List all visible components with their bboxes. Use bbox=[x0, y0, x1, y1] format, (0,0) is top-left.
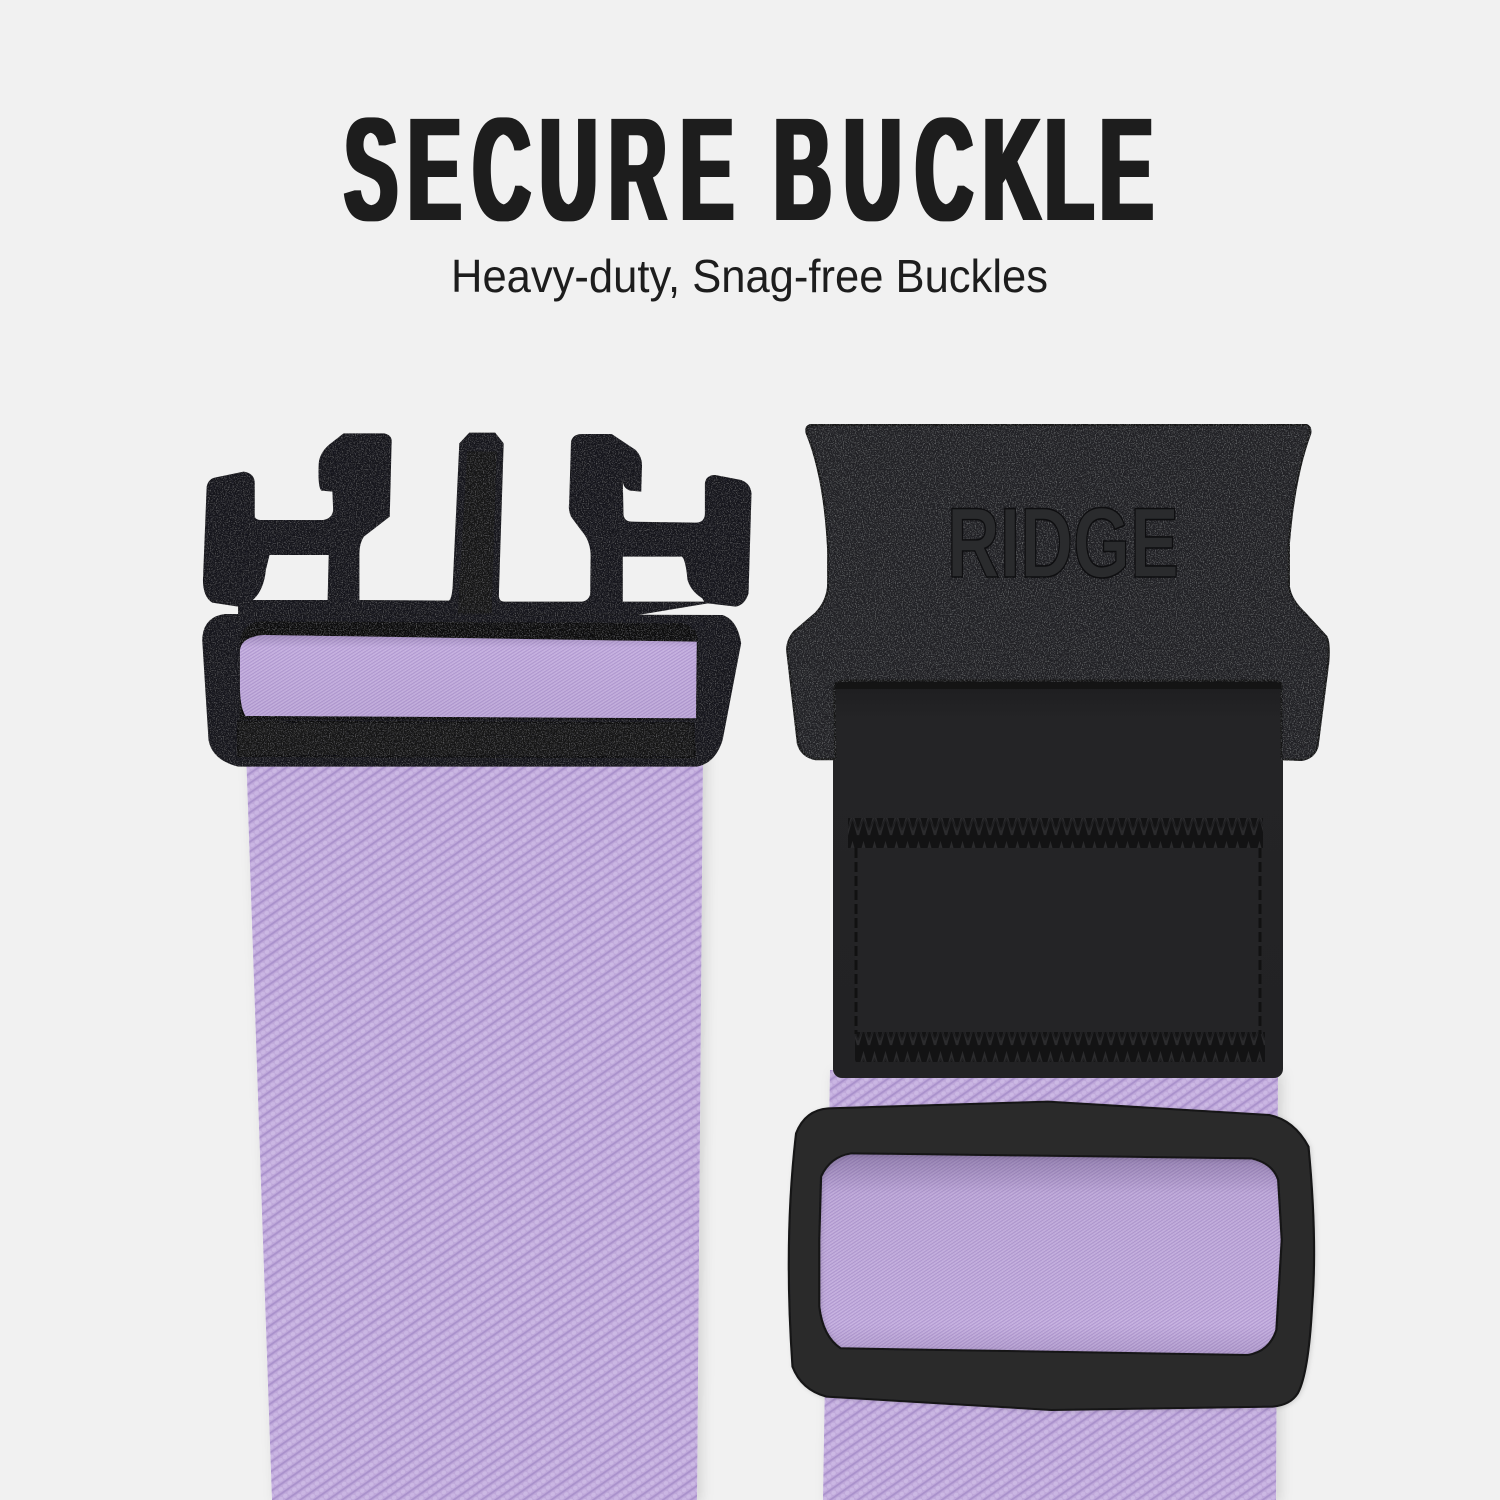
stitched patch bbox=[848, 818, 1265, 1062]
right strap with buckle bbox=[787, 425, 1329, 1500]
lower tri-glide loop bbox=[789, 1102, 1314, 1410]
lilac elastic strap, left bbox=[246, 750, 703, 1500]
black nylon webbing with stitched patch bbox=[833, 670, 1283, 1078]
slot shadow on webbing bbox=[835, 682, 1281, 689]
subtitle: Heavy-duty, Snag-free Buckles bbox=[451, 250, 1048, 302]
top buckle plate bbox=[787, 425, 1329, 760]
embossed RIDGE logo: RIDGE bbox=[947, 487, 1179, 598]
left strap with fork buckle bbox=[202, 433, 752, 1500]
lilac elastic strap, right bbox=[823, 1070, 1278, 1500]
fork buckle teeth and slider frame bbox=[202, 433, 752, 767]
rolled strap inside slider window bbox=[240, 635, 697, 718]
title: SECURE BUCKLE bbox=[345, 88, 1153, 252]
